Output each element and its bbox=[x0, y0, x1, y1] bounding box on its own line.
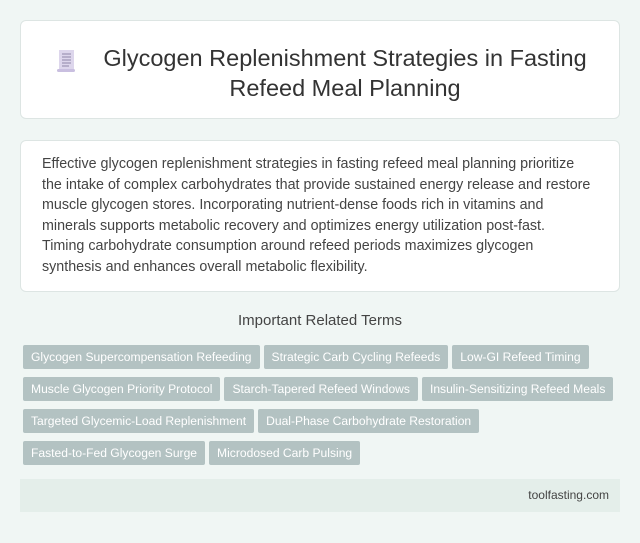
title card bbox=[20, 20, 620, 119]
description text: muscle glycogen stores. Incorporating nutrient-dense foods rich in vitamins and bbox=[42, 197, 543, 213]
description text: the intake of complex carbohydrates that provide sustained energy release and restore bbox=[42, 176, 590, 192]
description card bbox=[20, 140, 620, 292]
related terms heading: Important Related Terms bbox=[238, 312, 402, 329]
tags bbox=[23, 345, 613, 465]
footer source: toolfasting.com bbox=[528, 488, 609, 502]
description text bbox=[42, 156, 590, 274]
tags: Microdosed Carb Pulsing bbox=[217, 446, 352, 460]
tags: Strategic Carb Cycling Refeeds bbox=[272, 350, 440, 364]
description text: minerals supports metabolic recovery and optimizes energy utilization post-fast. bbox=[42, 218, 545, 234]
footer bbox=[20, 479, 620, 512]
tags: Targeted Glycemic-Load Replenishment bbox=[31, 414, 246, 428]
description text: Effective glycogen replenishment strategies in fasting refeed meal planning prioritize bbox=[42, 156, 574, 172]
tags: Muscle Glycogen Priority Protocol bbox=[31, 382, 212, 396]
tags: Glycogen Supercompensation Refeeding bbox=[31, 350, 252, 364]
title: Glycogen Replenishment Strategies in Fasting Refeed Meal Planning bbox=[103, 45, 587, 101]
tags: Insulin-Sensitizing Refeed Meals bbox=[430, 382, 605, 396]
description text: synthesis and enhances overall metabolic flexibility. bbox=[42, 258, 368, 274]
description text: Timing carbohydrate consumption around refeed periods maximizes glycogen bbox=[42, 238, 533, 254]
icon: document bbox=[57, 50, 75, 72]
tags: Starch-Tapered Refeed Windows bbox=[232, 382, 410, 396]
tags: Low-GI Refeed Timing bbox=[460, 350, 581, 364]
tags: Dual-Phase Carbohydrate Restoration bbox=[266, 414, 471, 428]
tags: Fasted-to-Fed Glycogen Surge bbox=[31, 446, 197, 460]
